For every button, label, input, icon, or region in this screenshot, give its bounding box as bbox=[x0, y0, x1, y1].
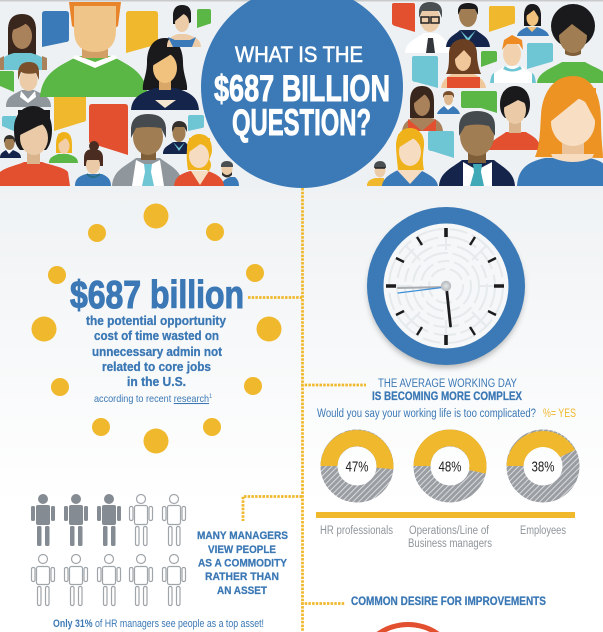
managers statement: AS A COMMODITY bbox=[198, 558, 288, 570]
person: woman with bun, blue top bbox=[75, 141, 111, 186]
donut labels bbox=[320, 525, 566, 550]
person: small woman blue straps bbox=[167, 5, 201, 47]
description text: in the U.S. bbox=[127, 374, 186, 389]
title text bbox=[214, 42, 390, 143]
person: man navy suit, teal tie bbox=[439, 111, 515, 186]
people icons: 3 of 10 filled bbox=[31, 494, 186, 606]
source note: 1 bbox=[209, 394, 213, 400]
banner: people and speech bubbles bbox=[0, 0, 603, 187]
person: small woman, blue top bbox=[517, 4, 549, 36]
person: man orange hair, green sweater bbox=[40, 2, 148, 97]
clock bbox=[367, 207, 525, 368]
survey question: Would you say your working life is too complicated? bbox=[317, 408, 536, 420]
heading: average working day: THE AVERAGE WORKING DAY bbox=[378, 378, 517, 390]
dotted connector lines bbox=[243, 188, 366, 632]
person: small man grey shirt bbox=[6, 62, 51, 107]
person: man grey suit, teal tie bbox=[112, 114, 183, 186]
managers statement: RATHER THAN bbox=[205, 571, 279, 583]
person: blonde woman, red top bbox=[174, 134, 224, 186]
heading: average working day bbox=[372, 378, 522, 403]
person: woman brown hair, red top bbox=[441, 39, 486, 88]
person: small man with glasses, yellow top bbox=[367, 161, 386, 186]
donut: Operations 48% bbox=[414, 430, 486, 494]
donut labels: Business managers bbox=[408, 538, 492, 550]
managers statement: AN ASSET bbox=[217, 585, 267, 597]
description text: cost of time wasted on bbox=[94, 328, 219, 343]
only 31% note: Only 31% of HR managers see people as a top asset! bbox=[53, 618, 264, 630]
person: small man with beard, blue top bbox=[221, 161, 239, 186]
legend: percent yes: %= YES bbox=[543, 408, 576, 420]
managers statement: MANY MANAGERS bbox=[197, 530, 288, 542]
description text: related to core jobs bbox=[102, 359, 211, 374]
person: man orange hair, white shirt bbox=[490, 35, 536, 83]
donut: HR professionals 47% bbox=[320, 430, 393, 494]
description text: unnecessary admin not bbox=[92, 344, 223, 359]
person: blonde woman, blue top bbox=[382, 128, 438, 186]
speech bubbles, right cluster bbox=[392, 3, 553, 158]
person: woman afro, green top bbox=[537, 4, 603, 83]
person: dark woman, red top bbox=[402, 86, 443, 131]
person: man with glasses, white shirt bbox=[405, 2, 450, 53]
heading: average working day: IS BECOMING MORE COMPLEX bbox=[372, 391, 522, 403]
person: small man navy sweater bbox=[163, 121, 188, 154]
donut: Operations 48%: 48% bbox=[438, 458, 462, 476]
person: woman black bob, red top bbox=[0, 106, 70, 186]
heading: common desire: COMMON DESIRE FOR IMPROVEMENTS bbox=[351, 596, 546, 608]
title text: $687 BILLION bbox=[214, 68, 390, 109]
person: woman black bob, red sweater bbox=[488, 86, 541, 150]
title text: WHAT IS THE bbox=[235, 42, 363, 67]
person: small man, blue shirt bbox=[437, 91, 460, 114]
donut: HR professionals 47%: 47% bbox=[346, 458, 368, 476]
person: woman brown hair, teal top bbox=[0, 14, 47, 70]
headline figure: $687 billion: $687 billion bbox=[70, 274, 244, 317]
person: man navy sweater, teal collar bbox=[446, 3, 490, 47]
description text: the potential opportunity bbox=[86, 313, 227, 328]
filled figures bbox=[31, 494, 121, 546]
maze pattern bbox=[389, 229, 503, 343]
person: woman long orange hair, blue top bbox=[517, 76, 603, 186]
donut labels: HR professionals bbox=[320, 525, 393, 537]
clock hands bbox=[398, 281, 451, 326]
description text bbox=[86, 313, 227, 389]
person: small blonde woman, green top bbox=[49, 132, 78, 163]
managers statement bbox=[197, 530, 288, 597]
yellow baseline bar bbox=[316, 512, 575, 518]
title text: QUESTION? bbox=[232, 102, 371, 143]
donut: Employees 38% bbox=[506, 431, 575, 494]
donut: Employees 38%: 38% bbox=[532, 458, 554, 476]
source note: according to recent research bbox=[94, 393, 215, 405]
speech bubbles, left cluster bbox=[0, 9, 211, 155]
person: woman black hair, navy top bbox=[131, 38, 199, 110]
ring of yellow dots bbox=[32, 204, 282, 454]
title circle bbox=[201, 0, 403, 188]
managers statement: VIEW PEOPLE bbox=[208, 544, 276, 556]
donut labels: Operations/Line of bbox=[409, 525, 490, 537]
donut labels: Employees bbox=[520, 525, 566, 537]
red gauge arc bbox=[376, 622, 440, 632]
person: small man navy bbox=[0, 135, 21, 158]
outlined figures bbox=[32, 494, 186, 606]
clock ticks bbox=[386, 228, 504, 345]
